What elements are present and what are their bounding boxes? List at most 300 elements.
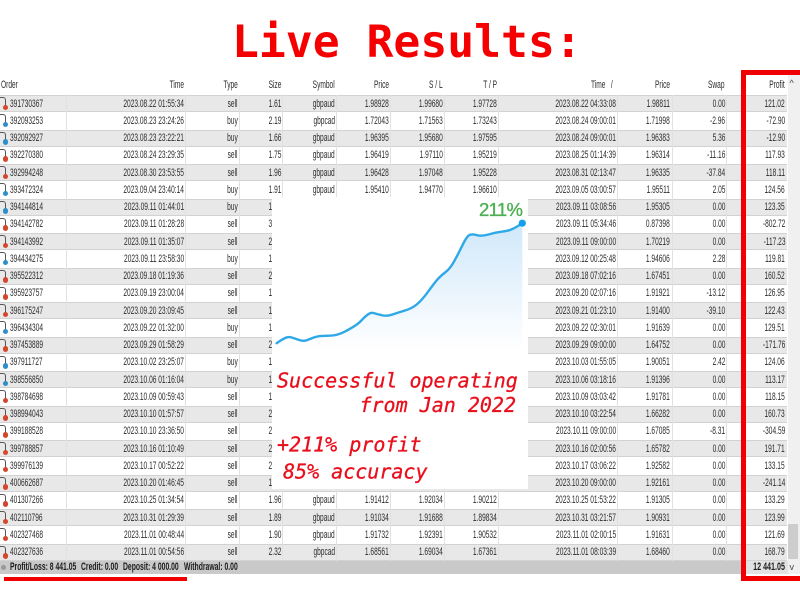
- table row 402327468: 1.91631: [646, 529, 670, 541]
- table row 401307266: sell: [228, 494, 238, 506]
- table row 399788857: 191.71: [765, 442, 785, 454]
- table row 396434304: [0, 319, 787, 336]
- table row 399788857: 2023.10.16 01:10:49: [123, 442, 184, 454]
- table row 396434304: 0.00: [712, 322, 725, 334]
- summary footer bar: Deposit: 4 000.00: [123, 561, 179, 573]
- table row 391730367: 1.98811: [647, 98, 670, 110]
- table row 402327468: 121.69: [765, 529, 785, 541]
- table row 398784698: 118.15: [765, 391, 785, 403]
- table row 391730367: 1.99680: [419, 98, 443, 110]
- table row 392093253: 1.71563: [419, 115, 443, 127]
- table row 397453889: sell: [228, 339, 238, 351]
- table row 392093253: buy: [227, 115, 238, 127]
- table row 392093253: 2023.08.24 09:00:01: [555, 115, 616, 127]
- table row 396434304: buy: [227, 322, 238, 334]
- scrollbar: [788, 74, 800, 574]
- table row 401307266: 1.92034: [419, 494, 443, 506]
- table row 392092927: 1.66: [268, 132, 281, 144]
- table row 394434275: 119.81: [765, 253, 785, 265]
- table header: Order: [1, 78, 18, 90]
- growth area chart: [277, 219, 526, 352]
- table row 402110796: gbpaud: [313, 512, 335, 524]
- table row 397911727: 1: [268, 356, 272, 368]
- table row 399976139: sell: [228, 460, 238, 472]
- table row 392270380: 2023.08.25 01:14:39: [555, 149, 616, 161]
- table row 394434275: 1.94606: [646, 253, 670, 265]
- table row 392270380: -11.16: [707, 149, 725, 161]
- table row 394144814: 1.95305: [646, 201, 670, 213]
- table row 394144814: [0, 198, 787, 216]
- table header: Swap: [708, 78, 725, 90]
- table row 399976139: 2023.10.17 03:06:22: [555, 460, 616, 472]
- table row 402327636: 168.79: [765, 546, 785, 558]
- table row 399188528: sell: [228, 425, 238, 437]
- table row 393472324: 1.96610: [473, 184, 497, 196]
- red underline below profit summary: [4, 576, 187, 580]
- table row 402327468: 1.92391: [419, 529, 443, 541]
- table row 392994248: 1.96: [268, 166, 281, 178]
- table row 402110796: 123.99: [765, 512, 785, 524]
- table row 394434275: [0, 250, 787, 268]
- table row 401307266: 1.96: [268, 494, 281, 506]
- table header: Type: [224, 78, 238, 90]
- table row 397911727: 2023.10.02 23:25:07: [123, 356, 184, 368]
- table row 393472324: 124.56: [765, 184, 785, 196]
- table header: Profit: [770, 78, 785, 90]
- table row 402110796: [0, 509, 787, 526]
- table header: T / P: [483, 78, 497, 90]
- table row 400662687: 400662687: [10, 477, 43, 489]
- table row 399188528: [0, 423, 787, 440]
- table header: Price: [655, 78, 670, 90]
- table row 399188528: 399188528: [10, 425, 43, 437]
- table row 399188528: 2023.10.10 23:36:50: [123, 425, 184, 437]
- table row 397453889: [0, 336, 787, 354]
- table row 398994043: 160.73: [765, 408, 785, 420]
- table row 395923757: sell: [228, 287, 238, 299]
- table row 394142782: -802.72: [763, 218, 785, 230]
- table row 392994248: sell: [228, 166, 238, 178]
- table row 394143992: 2023.09.11 01:35:07: [124, 236, 184, 248]
- table row 395522312: 2023.09.18 01:19:36: [123, 270, 184, 282]
- table row 392270380: 1.95219: [473, 149, 497, 161]
- table row 391730367: 1.61: [268, 98, 281, 110]
- table row 394434275: 394434275: [10, 253, 43, 265]
- table row 402327636: 0.00: [712, 546, 725, 558]
- table row 394434275: 2.28: [712, 253, 725, 265]
- table row 391730367: 121.02: [765, 98, 785, 110]
- table row 392092927: 1.97595: [473, 132, 497, 144]
- table row 402110796: 1.91034: [365, 512, 389, 524]
- table row 402110796: sell: [228, 512, 238, 524]
- table row 392994248: 1.97048: [419, 166, 443, 178]
- table row 391730367: 1.97728: [473, 98, 497, 110]
- table row 391730367: 1.98928: [365, 98, 389, 110]
- table row 398556850: 2023.10.06 03:18:16: [555, 374, 616, 386]
- table row 402110796: 0.00: [712, 512, 725, 524]
- scrollbar: v: [790, 562, 794, 572]
- table row 396434304: 2023.09.22 02:30:01: [555, 322, 616, 334]
- table row 394143992: 2023.09.11 09:00:00: [556, 236, 616, 248]
- table header: Symbol: [313, 78, 335, 90]
- table row 402110796: 2023.10.31 01:29:39: [123, 512, 184, 524]
- table row 392270380: 2023.08.24 23:29:35: [123, 149, 184, 161]
- table row 401307266: 1.90212: [473, 494, 497, 506]
- table row 394143992: [0, 233, 787, 250]
- table row 398784698: 1: [268, 391, 272, 403]
- table row 392994248: 1.96335: [646, 166, 670, 178]
- table row 398994043: 398994043: [10, 408, 43, 420]
- table row 394143992: -117.23: [763, 236, 785, 248]
- table row 399976139: 0.00: [712, 460, 725, 472]
- table row 399976139: 2: [268, 460, 272, 472]
- table row 401307266: 0.00: [712, 494, 725, 506]
- table row 395923757: -13.12: [706, 287, 725, 299]
- table row 400662687: 1.92161: [646, 477, 670, 489]
- table row 396175247: [0, 302, 787, 319]
- table row 395522312: 0.00: [712, 270, 725, 282]
- table row 392270380: 1.75: [268, 149, 281, 161]
- table row 392270380: 1.96314: [646, 149, 670, 161]
- table row 395522312: 2: [268, 270, 272, 282]
- table row 399788857: 0.00: [712, 442, 725, 454]
- table row 395923757: 1.91921: [646, 287, 670, 299]
- table row 402327636: 1.67361: [473, 546, 497, 558]
- table row 402110796: 2023.10.31 03:21:57: [555, 512, 616, 524]
- table row 392994248: 1.95228: [473, 166, 497, 178]
- table row 397911727: 2023.10.03 01:55:05: [555, 356, 616, 368]
- table row 392270380: 392270380: [10, 149, 43, 161]
- table row 399788857: 2023.10.16 02:00:56: [555, 442, 616, 454]
- table row 397911727: 1.90051: [646, 356, 670, 368]
- table row 396175247: 2023.09.20 23:09:45: [123, 304, 184, 316]
- table row 393472324: 1.95410: [365, 184, 389, 196]
- table row 398556850: 2023.10.06 01:16:04: [123, 374, 184, 386]
- table row 392092927: 5.36: [712, 132, 725, 144]
- table row 398784698: 1.91781: [646, 391, 670, 403]
- table row 393472324: [0, 181, 787, 198]
- table row 402327468: 402327468: [10, 529, 43, 541]
- table row 394434275: 2023.09.12 00:25:48: [555, 253, 616, 265]
- table row 393472324: 2023.09.04 23:40:14: [123, 184, 184, 196]
- table row 392092927: 392092927: [10, 132, 43, 144]
- table row 397911727: buy: [227, 356, 238, 368]
- table row 399188528: -8.31: [710, 425, 725, 437]
- table row 398556850: 398556850: [10, 374, 43, 386]
- table row 392093253: 1.73243: [473, 115, 497, 127]
- table row 391730367: gbpaud: [313, 98, 335, 110]
- table row 394144814: 0.00: [712, 201, 725, 213]
- table row 399976139: 2023.10.17 00:52:22: [123, 460, 184, 472]
- table row 396175247: 1.91400: [646, 304, 670, 316]
- table row 394142782: 0.87398: [646, 218, 670, 230]
- table row 392994248: [0, 164, 787, 181]
- summary footer bar: [0, 561, 788, 574]
- title: Live Results:: [232, 16, 582, 68]
- table row 392093253: -2.96: [710, 115, 725, 127]
- table row 398556850: 0.00: [712, 374, 725, 386]
- table row 399188528: 2: [268, 425, 272, 437]
- table row 391730367: sell: [228, 98, 238, 110]
- table row 394434275: 2023.09.11 23:58:30: [124, 253, 184, 265]
- table row 399788857: sell: [228, 442, 238, 454]
- table row 391730367: 2023.08.22 01:55:34: [123, 98, 184, 110]
- table row 400662687: 2023.10.20 09:00:00: [555, 477, 616, 489]
- table row 394144814: 2023.09.11 03:08:56: [556, 201, 616, 213]
- table row 400662687: sell: [228, 477, 238, 489]
- text: successful operating: Successful operating: [277, 368, 518, 392]
- table row 392092927: 2023.08.24 09:00:01: [555, 132, 616, 144]
- table row 396434304: 1: [268, 322, 272, 334]
- table row 402110796: 1.90931: [646, 512, 670, 524]
- table row 395923757: [0, 285, 787, 302]
- table row 395522312: 2023.09.18 07:02:16: [555, 270, 616, 282]
- table row 394434275: buy: [227, 253, 238, 265]
- table row 399188528: 1.67085: [646, 425, 670, 437]
- table row 398556850: 1.91396: [646, 374, 670, 386]
- table row 397453889: 2023.09.29 01:58:29: [123, 339, 184, 351]
- text: from Jan 2022: from Jan 2022: [359, 392, 516, 416]
- table row 397453889: 0.00: [712, 339, 725, 351]
- table row 402327636: [0, 544, 787, 561]
- table row 395522312: 395522312: [10, 270, 43, 282]
- table row 393472324: 1.95511: [647, 184, 670, 196]
- table row 396175247: 396175247: [10, 304, 43, 316]
- table row 393472324: gbpaud: [313, 184, 335, 196]
- table row 396434304: 129.51: [765, 322, 785, 334]
- table row 392093253: 1.72043: [365, 115, 389, 127]
- table row 392092927: 1.96383: [646, 132, 670, 144]
- table row 400662687: 1: [268, 477, 272, 489]
- table row 399976139: 1.92582: [646, 460, 670, 472]
- table row 394143992: 394143992: [10, 236, 43, 248]
- table row 398994043: 2023.10.10 01:57:57: [123, 408, 184, 420]
- table row 402110796: 1.89: [268, 512, 281, 524]
- table row 393472324: 1.91: [268, 184, 281, 196]
- table row 399188528: 2023.10.11 09:00:00: [556, 425, 616, 437]
- table row 396175247: -39.10: [706, 304, 725, 316]
- table row 394142782: 2023.09.11 05:34:46: [556, 218, 616, 230]
- table row 394142782: 394142782: [10, 218, 43, 230]
- table row 399788857: 399788857: [10, 442, 43, 454]
- table row 400662687: 2023.10.20 01:46:45: [123, 477, 184, 489]
- scrollbar: ^: [790, 78, 794, 88]
- table row 400662687: 0.00: [712, 477, 725, 489]
- table row 396434304: 396434304: [10, 322, 43, 334]
- table row 392270380: 1.97110: [420, 149, 443, 161]
- table row 402327636: 2.32: [268, 546, 281, 558]
- table row 392093253: 392093253: [10, 115, 43, 127]
- table row 402327636: gbpcad: [313, 546, 335, 558]
- table row 402327636: 1.68561: [365, 546, 389, 558]
- table row 393472324: 393472324: [10, 184, 43, 196]
- table row 398784698: 2023.10.09 00:59:43: [123, 391, 184, 403]
- table row 392270380: 1.96419: [365, 149, 389, 161]
- table row 392092927: 2023.08.23 23:22:21: [123, 132, 184, 144]
- table row 399788857: [0, 440, 787, 457]
- table row 402327468: gbpaud: [313, 529, 335, 541]
- table row 396175247: sell: [228, 304, 238, 316]
- table row 397453889: 2: [268, 339, 272, 351]
- table row 393472324: buy: [227, 184, 238, 196]
- table header: Price: [374, 78, 389, 90]
- table row 395522312: 160.52: [765, 270, 785, 282]
- table header: Time: [170, 78, 184, 90]
- table row 395923757: 2023.09.20 02:07:16: [555, 287, 616, 299]
- table row 396175247: 1: [268, 304, 272, 316]
- table row 402327468: 0.00: [712, 529, 725, 541]
- table row 392092927: 1.96395: [365, 132, 389, 144]
- table header: Time /: [591, 78, 612, 90]
- table row 392994248: -37.84: [706, 166, 725, 178]
- table row 399788857: 1.65782: [646, 442, 670, 454]
- table row 402327468: 1.90: [268, 529, 281, 541]
- table row 398556850: 113.17: [765, 374, 785, 386]
- summary footer bar: 12 441.05: [753, 561, 785, 573]
- table row 391730367: 391730367: [10, 98, 43, 110]
- table row 392994248: 1.96428: [365, 166, 389, 178]
- table row 396434304: 2023.09.22 01:32:00: [123, 322, 184, 334]
- table row 396175247: 2023.09.21 01:23:10: [555, 304, 616, 316]
- table row 395923757: 126.95: [765, 287, 785, 299]
- table row 400662687: -241.14: [763, 477, 785, 489]
- table row 392092927: [0, 130, 787, 147]
- table row 402327636: 1.68460: [646, 546, 670, 558]
- table row 394143992: 1.70219: [646, 236, 670, 248]
- table row 393472324: 2.05: [712, 184, 725, 196]
- table row 398784698: sell: [228, 391, 238, 403]
- table row 394142782: [0, 216, 787, 233]
- table header: Size: [268, 78, 281, 90]
- table row 391730367: [0, 95, 787, 112]
- table row 398784698: 398784698: [10, 391, 43, 403]
- table row 394143992: 2: [268, 236, 272, 248]
- table row 397453889: -171.76: [763, 339, 785, 351]
- white overlay panel: [272, 196, 528, 488]
- table row 391730367: 0.00: [712, 98, 725, 110]
- table row 393472324: 1.94770: [419, 184, 443, 196]
- table row 398994043: 2: [268, 408, 272, 420]
- table header: [0, 75, 787, 94]
- table row 401307266: [0, 492, 787, 509]
- table row 392093253: 1.71998: [646, 115, 670, 127]
- table row 402110796: 1.91688: [419, 512, 443, 524]
- table row 402327636: sell: [228, 546, 238, 558]
- table row 393472324: 2023.09.05 03:00:57: [555, 184, 616, 196]
- table row 402327468: 2023.11.01 02:00:15: [556, 529, 616, 541]
- table row 402327636: 1.69034: [419, 546, 443, 558]
- table row 402327636: 2023.11.01 08:03:39: [556, 546, 616, 558]
- table row 392270380: [0, 147, 787, 164]
- table row 394142782: 0.00: [712, 218, 725, 230]
- table row 398556850: 1: [268, 374, 272, 386]
- table row 392994248: gbpaud: [313, 166, 335, 178]
- table row 394144814: 123.35: [765, 201, 785, 213]
- summary footer bar: Profit/Loss: 8 441.05: [10, 561, 76, 573]
- table row 392994248: 2023.08.30 23:53:55: [123, 166, 184, 178]
- table row 397453889: 1.64752: [646, 339, 670, 351]
- table row 394144814: 1: [268, 201, 272, 213]
- 211% chart label: 211%: [479, 198, 523, 220]
- table row 402110796: 402110796: [10, 512, 43, 524]
- table row 392092927: 1.95680: [419, 132, 443, 144]
- table row 401307266: gbpaud: [313, 494, 335, 506]
- table row 394143992: sell: [228, 236, 238, 248]
- table row 396175247: 122.43: [765, 304, 785, 316]
- table row 392093253: gbpcad: [313, 115, 335, 127]
- table row 395522312: [0, 268, 787, 285]
- table row 402327468: [0, 526, 787, 544]
- table row 402327468: sell: [228, 529, 238, 541]
- table row 398784698: 2023.10.09 03:03:42: [555, 391, 616, 403]
- table row 395522312: sell: [228, 270, 238, 282]
- table row 397453889: 397453889: [10, 339, 43, 351]
- table row 402327468: 2023.11.01 00:48:44: [124, 529, 184, 541]
- table row 391730367: 2023.08.22 04:33:08: [555, 98, 616, 110]
- table row 392270380: sell: [228, 149, 238, 161]
- table row 397911727: 124.06: [765, 356, 785, 368]
- table row 401307266: 2023.10.25 01:34:54: [123, 494, 184, 506]
- table row 395522312: 1.67451: [646, 270, 670, 282]
- table row 402327468: 1.91732: [365, 529, 389, 541]
- table row 402327468: 1.90532: [473, 529, 497, 541]
- red frame around profit column: [741, 70, 800, 580]
- table row 392092927: buy: [227, 132, 238, 144]
- table row 398556850: buy: [227, 374, 238, 386]
- table row 401307266: 1.91305: [646, 494, 670, 506]
- table row 399188528: -304.59: [763, 425, 785, 437]
- table row 394144814: buy: [227, 201, 238, 213]
- table row 402327636: 402327636: [10, 546, 43, 558]
- table row 401307266: 1.91412: [365, 494, 389, 506]
- table row 398994043: sell: [228, 408, 238, 420]
- table row 392093253: -72.90: [766, 115, 785, 127]
- table row 400662687: [0, 474, 787, 492]
- table row 401307266: 133.29: [765, 494, 785, 506]
- table row 398994043: 0.00: [712, 408, 725, 420]
- table header: S / L: [429, 78, 443, 90]
- table row 397453889: 2023.09.29 09:00:00: [555, 339, 616, 351]
- table row 396434304: 1.91639: [646, 322, 670, 334]
- table row 399976139: 399976139: [10, 460, 43, 472]
- table row 392994248: 118.11: [766, 166, 785, 178]
- table row 397911727: 397911727: [10, 356, 43, 368]
- table row 401307266: 2023.10.25 01:53:22: [555, 494, 616, 506]
- table row 397911727: 2.42: [712, 356, 725, 368]
- table row 401307266: 401307266: [10, 494, 43, 506]
- summary footer bar: Withdrawal: 0.00: [184, 561, 238, 573]
- table row 398784698: 0.00: [712, 391, 725, 403]
- table row 392093253: [0, 112, 787, 130]
- table row 399788857: 2: [268, 442, 272, 454]
- table row 399976139: [0, 457, 787, 474]
- table row 392092927: gbpaud: [313, 132, 335, 144]
- text: 85% accuracy: 85% accuracy: [283, 459, 428, 483]
- text: +211% profit: +211% profit: [277, 432, 422, 456]
- table row 398994043: 2023.10.10 03:22:54: [555, 408, 616, 420]
- table row 398556850: [0, 371, 787, 388]
- table row 402327636: 2023.11.01 00:54:56: [124, 546, 184, 558]
- table row 395923757: 395923757: [10, 287, 43, 299]
- table row 395923757: 2023.09.19 23:00:04: [123, 287, 184, 299]
- table row 398784698: [0, 388, 787, 406]
- table row 394143992: 0.00: [712, 236, 725, 248]
- table row 395923757: 1: [268, 287, 272, 299]
- table row 394142782: 3: [268, 218, 272, 230]
- table row 392093253: 2023.08.23 23:24:26: [123, 115, 184, 127]
- table row 397911727: [0, 354, 787, 371]
- table row 392093253: 2.19: [268, 115, 281, 127]
